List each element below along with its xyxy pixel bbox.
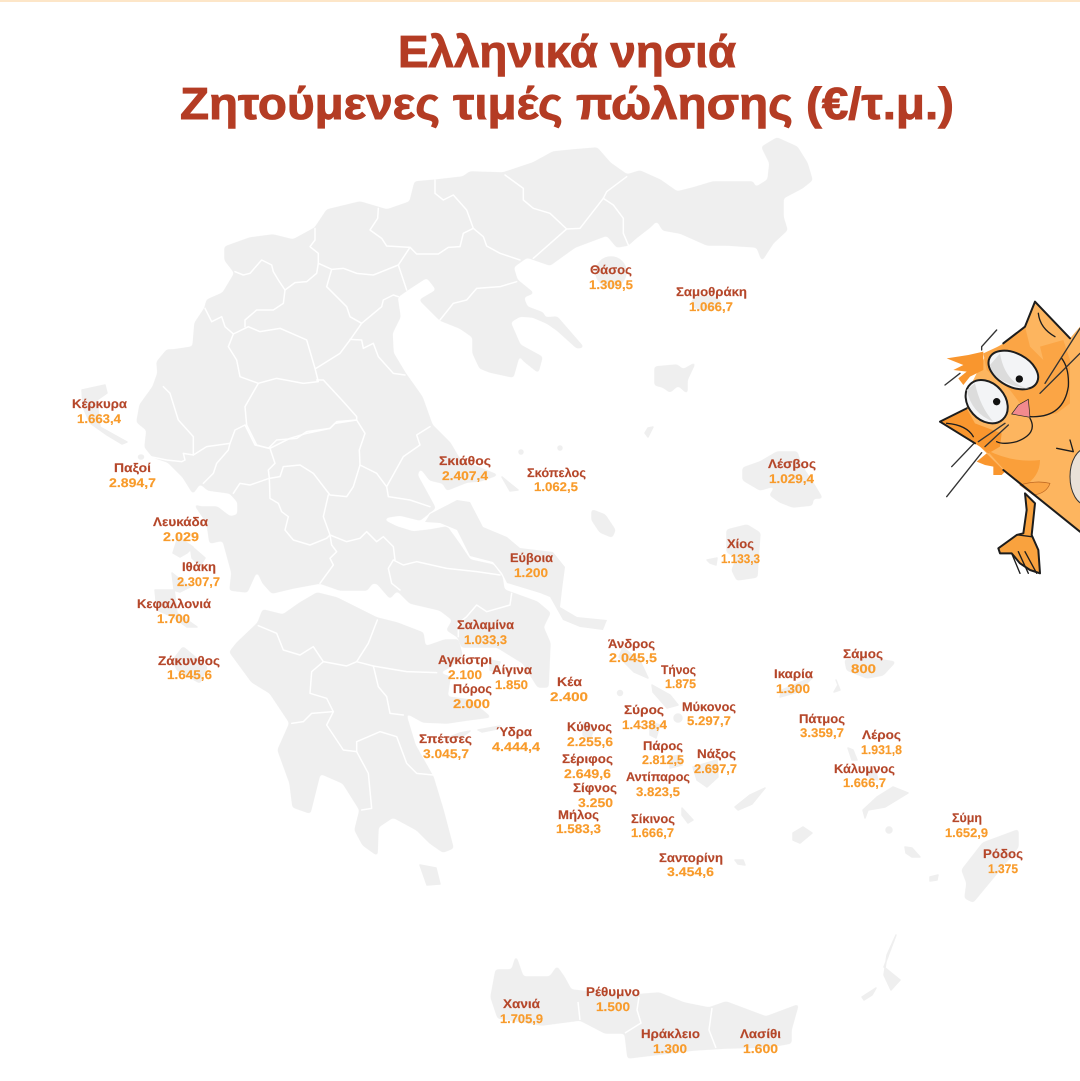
label: Μήλος xyxy=(556,808,601,836)
label: Κέα: 2.400 xyxy=(550,690,588,704)
label: Κεφαλλονιά xyxy=(137,597,211,626)
label: Μύκονος: 5.297,7 xyxy=(687,714,731,728)
label: Παξοί xyxy=(109,461,156,490)
label: Εύβοια xyxy=(510,551,553,580)
label: Σκιάθος: 2.407,4 xyxy=(442,469,488,483)
label: Σίκινος xyxy=(631,812,675,840)
label: Κύθνος: 2.255,6 xyxy=(567,735,613,749)
label: Λέσβος: 1.029,4 xyxy=(769,472,814,486)
label: Αγκίστρι: Αγκίστρι xyxy=(438,653,493,667)
label: Σκιάθος xyxy=(439,454,491,483)
label: Σαλαμίνα: 1.033,3 xyxy=(464,633,507,647)
label: Ύδρα: 4.444,4 xyxy=(492,740,540,754)
label: Σίφνος xyxy=(573,781,617,810)
label: Σίφνος: 3.250 xyxy=(578,796,613,810)
label: Λασίθι xyxy=(740,1027,782,1056)
label: Αίγινα xyxy=(492,663,532,692)
label: Τήνος: 1.875 xyxy=(665,677,696,691)
label: Σκόπελος: Σκόπελος xyxy=(527,466,586,480)
label: Θάσος xyxy=(589,263,633,292)
label: Λευκάδα xyxy=(153,515,208,544)
label: Ρόδος: Ρόδος xyxy=(983,847,1023,861)
label: Εύβοια: 1.200 xyxy=(514,566,548,580)
label: Λέρος: Λέρος xyxy=(862,728,901,742)
label: Ικαρία: Ικαρία xyxy=(774,667,813,681)
label: Σέριφος: 2.649,6 xyxy=(564,767,611,781)
label: Παξοί: 2.894,7 xyxy=(109,476,156,490)
label: Αγκίστρι: 2.100 xyxy=(448,668,482,682)
label: Σύρος xyxy=(622,703,667,732)
label: Πάτμος xyxy=(799,712,845,740)
label: Ρόδος xyxy=(983,847,1023,876)
label: Ζάκυνθος: Ζάκυνθος xyxy=(158,654,220,668)
label: Σαλαμίνα xyxy=(457,618,514,647)
label: Ρέθυμνο: Ρέθυμνο xyxy=(586,985,640,999)
label: Κέα xyxy=(550,675,588,704)
label: Σύρος: 1.438,4 xyxy=(622,718,667,732)
label: Εύβοια: Εύβοια xyxy=(510,551,553,565)
label: Σπέτσες: 3.045,7 xyxy=(423,747,469,761)
label: Πάρος xyxy=(642,739,684,767)
label: Νάξος xyxy=(694,747,737,776)
label: Κέρκυρα xyxy=(72,397,127,426)
label: Άνδρος: Άνδρος xyxy=(608,637,655,651)
label: Σύμη: 1.652,9 xyxy=(945,826,988,840)
label: Σπέτσες xyxy=(419,732,472,761)
label: Σίκινος: 1.666,7 xyxy=(631,826,674,840)
label: Ηράκλειο xyxy=(641,1027,700,1056)
label: Σαντορίνη xyxy=(659,851,723,879)
label: Σκόπελος: 1.062,5 xyxy=(534,480,578,494)
label: Σύρος: Σύρος xyxy=(624,703,664,717)
title: Ελληνικά νησιά xyxy=(398,26,736,77)
label: Αντίπαρος: Αντίπαρος xyxy=(626,770,690,784)
label: Ιθάκη: 2.307,7 xyxy=(177,575,220,589)
label: Πάτμος: 3.359,7 xyxy=(800,726,844,740)
label: Θάσος: 1.309,5 xyxy=(589,278,633,292)
label: Λευκάδα: Λευκάδα xyxy=(153,515,208,529)
label: Πάτμος: Πάτμος xyxy=(799,712,845,726)
label: Σύμη xyxy=(945,811,988,840)
label: Σίκινος: Σίκινος xyxy=(631,812,675,826)
label: Μήλος: Μήλος xyxy=(558,808,599,822)
label: Πόρος xyxy=(453,682,492,711)
label: Ικαρία xyxy=(774,667,813,696)
label: Σαμοθράκη xyxy=(676,285,747,314)
Peloponnese xyxy=(230,593,490,855)
map of Greece xyxy=(82,138,1018,1058)
label: Πόρος: 2.000 xyxy=(453,697,490,711)
label: Λέρος xyxy=(861,728,902,757)
label: Πόρος: Πόρος xyxy=(453,682,492,696)
label: Ρόδος: 1.375 xyxy=(988,862,1018,876)
title xyxy=(180,26,954,129)
label: Κάλυμνος: Κάλυμνος xyxy=(834,762,895,776)
label: Κύθνος: Κύθνος xyxy=(567,720,612,734)
label: Χίος xyxy=(721,537,760,566)
label: Κεφαλλονιά: Κεφαλλονιά xyxy=(137,597,211,611)
label: Ικαρία: 1.300 xyxy=(776,682,810,696)
label: Κέα: Κέα xyxy=(557,675,582,689)
label: Κεφαλλονιά: 1.700 xyxy=(157,612,190,626)
label: Ρέθυμνο xyxy=(586,985,640,1014)
label: Άνδρος xyxy=(608,637,657,665)
label: Κέρκυρα: Κέρκυρα xyxy=(72,397,127,411)
label: Ρέθυμνο: 1.500 xyxy=(596,1000,630,1014)
label: Λασίθι: 1.600 xyxy=(743,1042,778,1056)
label: Σαμοθράκη: Σαμοθράκη xyxy=(676,285,747,299)
label: Σάμος: 800 xyxy=(851,662,876,676)
Crete xyxy=(491,957,798,1058)
label: Τήνος xyxy=(661,663,696,691)
label: Θάσος: Θάσος xyxy=(590,263,632,277)
label: Σέριφος: Σέριφος xyxy=(562,752,613,766)
label: Λέσβος xyxy=(768,457,816,486)
label: Λέσβος: Λέσβος xyxy=(768,457,816,471)
label: Ύδρα xyxy=(492,725,540,754)
label: Μύκονος xyxy=(682,700,736,728)
label: Λασίθι: Λασίθι xyxy=(740,1027,782,1041)
label: Σίφνος: Σίφνος xyxy=(573,781,617,795)
label: Αίγινα: 1.850 xyxy=(495,678,528,692)
label: Κύθνος xyxy=(567,720,613,749)
label: Άνδρος: 2.045,5 xyxy=(609,651,657,665)
label: Πάρος: Πάρος xyxy=(643,739,683,753)
label: Χανιά: 1.705,9 xyxy=(500,1012,543,1026)
illustration: orange cat peeking from the right xyxy=(940,302,1080,573)
label: Αίγινα: Αίγινα xyxy=(492,663,532,677)
label: Νάξος: 2.697,7 xyxy=(694,762,737,776)
label: Σάμος: Σάμος xyxy=(843,647,883,661)
label: Σέριφος xyxy=(562,752,613,781)
label: Κάλυμνος: 1.666,7 xyxy=(843,776,886,790)
regional boundaries centre xyxy=(150,387,430,560)
label: Σκιάθος: Σκιάθος xyxy=(439,454,491,468)
label: Χανιά: Χανιά xyxy=(503,997,540,1011)
label: Μήλος: 1.583,3 xyxy=(556,822,601,836)
mainland xyxy=(137,138,812,687)
label: Σαμοθράκη: 1.066,7 xyxy=(689,300,733,314)
label: Κάλυμνος xyxy=(834,762,895,790)
label: Μύκονος: Μύκονος xyxy=(682,700,736,714)
regional boundaries south xyxy=(258,535,512,810)
label: Ύδρα: Ύδρα xyxy=(496,725,532,739)
label: Σάμος xyxy=(843,647,883,676)
label: Ιθάκη: Ιθάκη xyxy=(182,560,216,574)
label: Λέρος: 1.931,8 xyxy=(861,743,902,757)
label: Χίος: Χίος xyxy=(727,537,754,551)
label: Ιθάκη xyxy=(177,560,220,589)
label: Τήνος: Τήνος xyxy=(661,663,696,677)
label: Νάξος: Νάξος xyxy=(697,747,736,761)
label: Ζάκυνθος: 1.645,6 xyxy=(167,668,212,682)
label: Χανιά xyxy=(500,997,543,1026)
label: Σπέτσες: Σπέτσες xyxy=(419,732,472,746)
label: Σαντορίνη: 3.454,6 xyxy=(667,865,714,879)
label: Πάρος: 2.812,5 xyxy=(642,753,684,767)
regional boundaries north xyxy=(205,175,628,448)
Euboea xyxy=(425,500,607,630)
label: Λευκάδα: 2.029 xyxy=(163,530,199,544)
label: Σαλαμίνα: Σαλαμίνα xyxy=(457,618,514,632)
label: Ζάκυνθος xyxy=(158,654,220,682)
label: Σκόπελος xyxy=(527,466,586,494)
label: Αγκίστρι xyxy=(438,653,493,682)
label: Σαντορίνη: Σαντορίνη xyxy=(659,851,723,865)
islands xyxy=(82,257,1018,1000)
label: Ηράκλειο: Ηράκλειο xyxy=(641,1027,700,1041)
label: Σύμη: Σύμη xyxy=(952,811,982,825)
label: Αντίπαρος xyxy=(626,770,690,799)
label: Χίος: 1.133,3 xyxy=(721,552,760,566)
title: Ζητούμενες τιμές πώλησης (€/τ.μ.) xyxy=(180,78,954,129)
label: Κέρκυρα: 1.663,4 xyxy=(77,412,121,426)
label: Ηράκλειο: 1.300 xyxy=(653,1042,687,1056)
label: Παξοί: Παξοί xyxy=(114,461,152,475)
label: Αντίπαρος: 3.823,5 xyxy=(636,785,680,799)
